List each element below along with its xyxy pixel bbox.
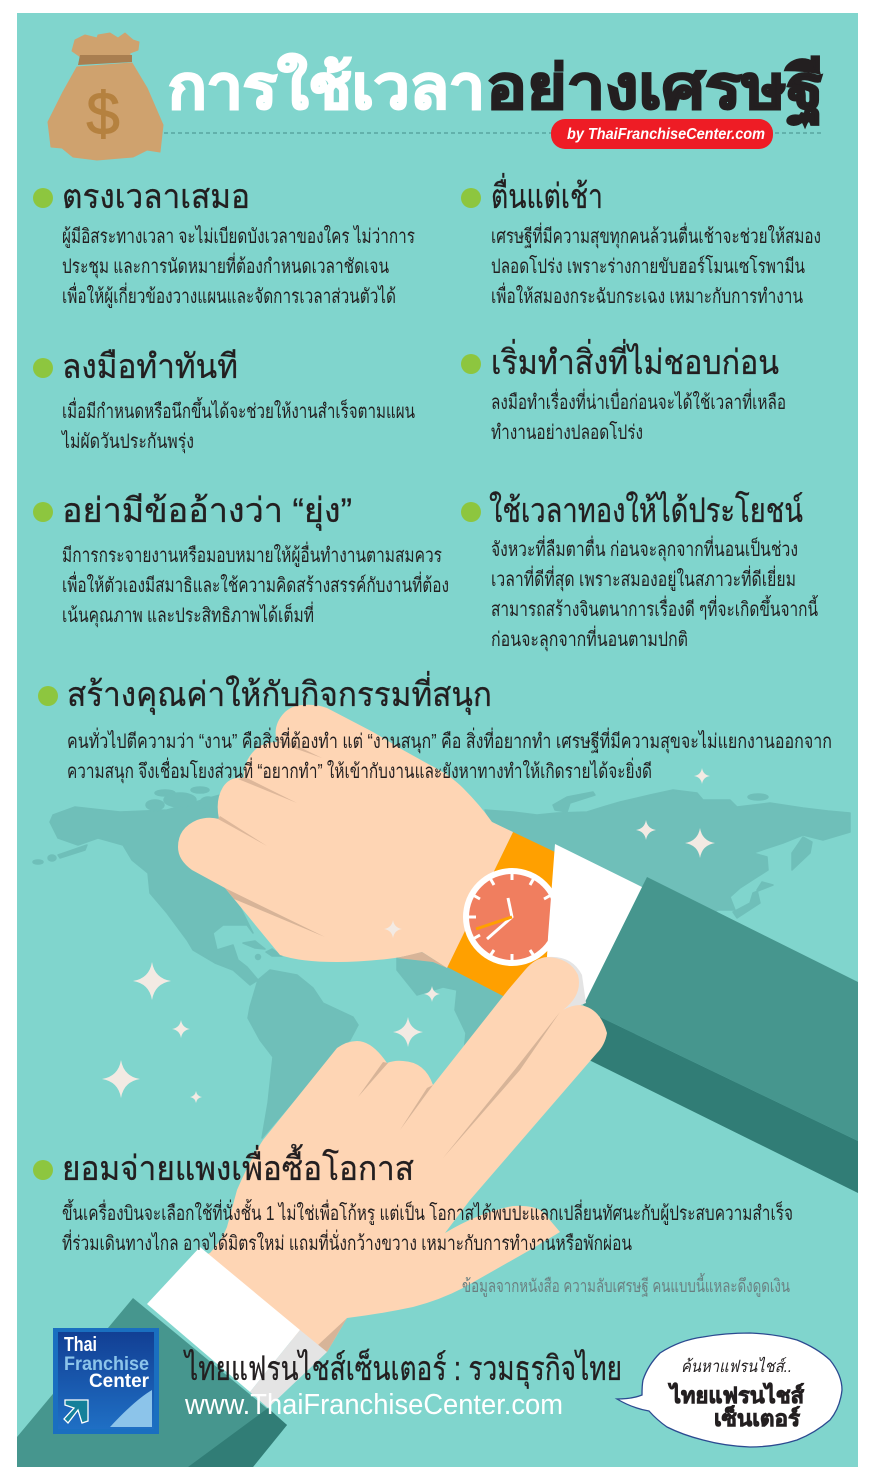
sparkle stars xyxy=(102,768,715,1103)
section: golden time: จังหวะที่ลืมตาตื่น ก่อนจะลุกจากที่นอนเป็นช่วง xyxy=(491,535,798,562)
footer url: www.ThaiFranchiseCenter.com xyxy=(184,1389,563,1421)
lower sleeve xyxy=(17,1298,287,1467)
section: act now: ลงมือทำทันที xyxy=(62,348,238,386)
section: wake early xyxy=(461,173,821,308)
section: no busy excuse: เน้นคุณภาพ และประสิทธิภาพได้เต็มที่ xyxy=(62,601,314,628)
section: act now: เมื่อมีกำหนดหรือนึกขึ้นได้จะช่วยให้งานสำเร็จตามแผน xyxy=(62,397,415,423)
title dashed rule xyxy=(164,132,822,134)
section: unpleasant first: เริ่มทำสิ่งที่ไม่ชอบก่อน xyxy=(491,339,779,382)
section: golden time xyxy=(461,491,818,652)
logo: Thai Franchise Center: Thai xyxy=(64,1334,97,1356)
section: act now xyxy=(33,348,415,454)
section: pay for opportunity: ยอมจ่ายแพงเพื่อซื้อโอกาส xyxy=(62,1144,414,1188)
watch face xyxy=(463,868,561,966)
icon: money bag xyxy=(48,33,163,160)
section: punctuality: ตรงเวลาเสมอ xyxy=(62,178,250,216)
section: make work fun xyxy=(38,671,832,784)
section: golden time: ก่อนจะลุกจากที่นอนตามปกติ xyxy=(491,625,688,652)
title xyxy=(168,53,824,126)
watch strap xyxy=(447,832,555,997)
title: การใช้เวลา xyxy=(168,53,485,121)
section: no busy excuse: อย่ามีข้ออ้างว่า “ยุ่ง” xyxy=(62,492,352,531)
section: punctuality: ประชุม และการนัดหมายที่ต้องกำหนดเวลาชัดเจน xyxy=(62,252,389,279)
section: unpleasant first: ทำงานอย่างปลอดโปร่ง xyxy=(491,421,643,444)
section: punctuality: ผู้มีอิสระทางเวลา จะไม่เบียดบังเวลาของใคร ไม่ว่าการ xyxy=(62,225,415,249)
section: wake early: ตื่นแต่เช้า xyxy=(491,173,603,216)
section: punctuality: เพื่อให้ผู้เกี่ยวข้องวางแผนและจัดการเวลาส่วนตัวได้ xyxy=(62,282,396,309)
speech bubble: ค้นหาแฟรนไชส์.. xyxy=(681,1356,792,1376)
speech bubble xyxy=(617,1333,842,1447)
section: punctuality xyxy=(33,178,415,309)
upper hand xyxy=(178,705,513,968)
section: make work fun: สร้างคุณค่าให้กับกิจกรรมที่สนุก xyxy=(67,671,492,715)
section: pay for opportunity xyxy=(33,1144,793,1255)
world map xyxy=(33,787,850,1138)
section: pay for opportunity: ที่ร่วมเดินทางไกล อาจได้มิตรใหม่ แถมที่นั่งกว้างขวาง เหมาะกับการทำงานหรือพักผ่อน xyxy=(62,1229,632,1255)
title: อย่างเศรษฐี xyxy=(486,54,824,126)
section: make work fun: ความสนุก จึงเชื่อมโยงส่วนที่ “อยากทำ” ให้เข้ากับงานและยังหาทางทำให้เกิดรายได้จะยิ่งดี xyxy=(67,757,652,784)
section: no busy excuse: เพื่อให้ตัวเองมีสมาธิและใช้ความคิดสร้างสรรค์กับงานที่ต้อง xyxy=(62,571,449,597)
speech bubble: เซ็นเตอร์ xyxy=(714,1404,800,1431)
upper arm sleeve xyxy=(583,877,858,1193)
section: act now: ไม่ผัดวันประกันพรุ่ง xyxy=(60,430,194,454)
section: no busy excuse xyxy=(33,492,449,628)
upper shirt cuff xyxy=(547,844,642,1012)
speech bubble: ไทยแฟรนไชส์ xyxy=(668,1382,805,1408)
logo: Thai Franchise Center xyxy=(53,1328,159,1434)
section: golden time: ใช้เวลาทองให้ได้ประโยชน์ xyxy=(489,491,803,530)
icon: money bag: $ xyxy=(86,80,120,147)
section: golden time: เวลาที่ดีที่สุด เพราะสมองอยู่ในสภาวะที่ดีเยี่ยม xyxy=(491,565,796,592)
logo: Thai Franchise Center: Center xyxy=(89,1371,150,1392)
lower hand xyxy=(198,957,607,1352)
logo: Thai Franchise Center: Franchise xyxy=(64,1354,149,1375)
section: no busy excuse: มีการกระจายงานหรือมอบหมายให้ผู้อื่นทำงานตามสมควร xyxy=(62,541,442,568)
section: unpleasant first xyxy=(461,339,786,444)
section: unpleasant first: ลงมือทำเรื่องที่น่าเบื่อก่อนจะได้ใช้เวลาที่เหลือ xyxy=(491,388,786,414)
byline pill xyxy=(551,119,773,149)
byline pill: by ThaiFranchiseCenter.com xyxy=(567,126,765,143)
footer brand line: ไทยแฟรนไชส์เซ็นเตอร์ : รวมธุรกิจไทย xyxy=(183,1348,622,1389)
lower shirt cuff xyxy=(147,1247,327,1408)
